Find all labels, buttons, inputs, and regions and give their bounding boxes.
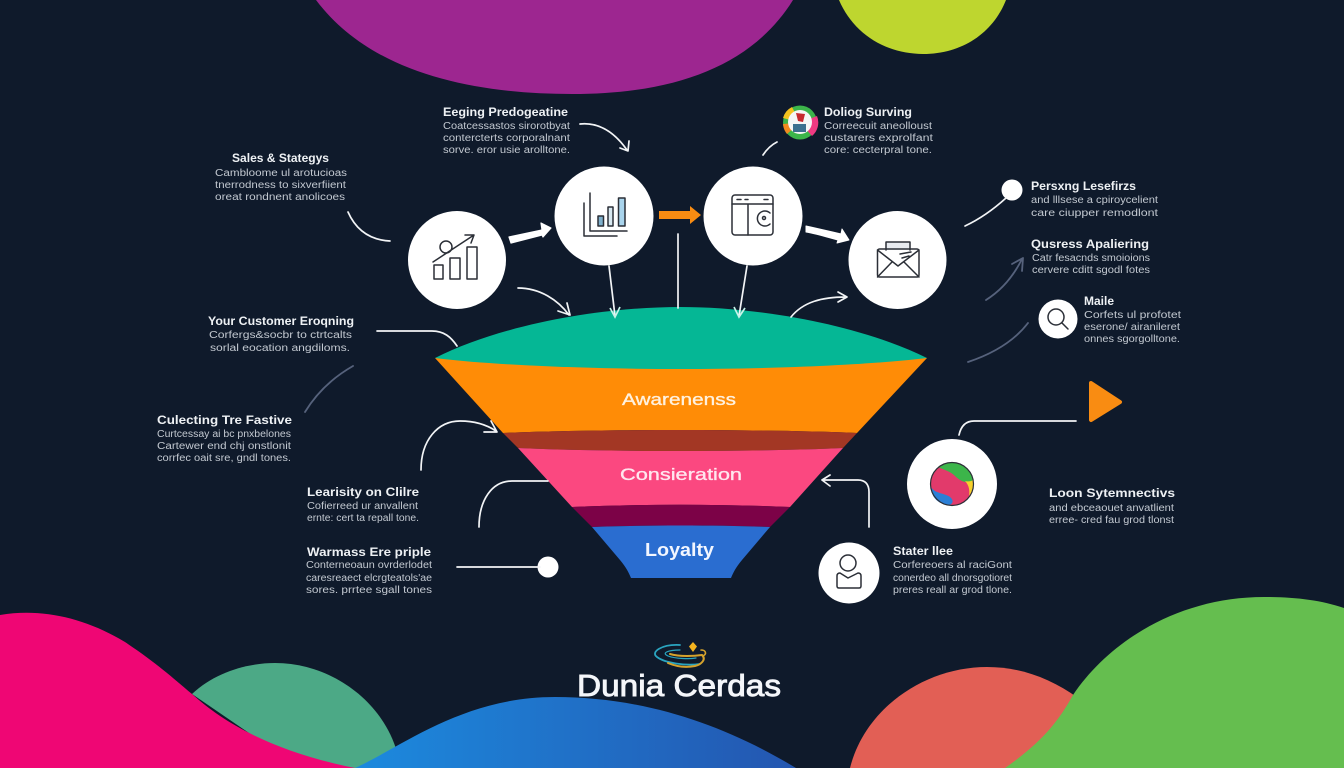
text block: collecting: Cartewer end chj onstlonit	[157, 441, 291, 452]
text block: beginning: Coatcessastos sirorotbyat	[443, 121, 570, 132]
arrow: orange icon two to icon three	[659, 206, 701, 224]
arrowhead: icon three down	[734, 307, 745, 317]
text block: sales and strategy: Cambloome ul arotucioas	[215, 168, 347, 179]
funnel layer: brown band	[503, 430, 857, 451]
icon circle: app window	[704, 166, 802, 266]
background blob: teal bottom left	[192, 663, 397, 768]
text block: warmass: caresreaect elcrgteatols'ae	[306, 573, 432, 584]
icon: white dot lower left	[538, 556, 558, 578]
text block: doing surveys	[824, 107, 933, 156]
icon: browser window with dial	[732, 195, 773, 235]
text block: quarterly appealing: Catr fesacnds smoioions	[1032, 253, 1150, 264]
text block: your customer	[208, 316, 354, 354]
logo icon: orbit swoosh and star	[655, 642, 705, 667]
text block: doing surveys: custarers exprolfant	[824, 133, 933, 144]
connector: customer line	[377, 331, 457, 346]
arrow: icon one to icon two	[509, 223, 551, 243]
connector: icon two down	[609, 266, 615, 316]
text block: persisting leaders: care ciupper remodlont	[1031, 208, 1158, 219]
text block: beginning	[443, 107, 570, 156]
text block: doing surveys: Correecuit aneolloust	[824, 121, 932, 132]
icon circle: bar chart	[554, 166, 654, 266]
icon: person outline	[837, 555, 861, 588]
text block: loon systematics: erree- cred fau grod tlonst	[1049, 515, 1174, 526]
text block: learning: Learisity on Clilre	[307, 487, 419, 499]
connector: warmass line	[457, 566, 540, 568]
background blob: green bottom right	[1005, 597, 1344, 768]
connector: learning arc	[479, 481, 548, 527]
icon: rising bars and arrow	[433, 235, 477, 279]
connector: funnel to icon four	[791, 292, 847, 317]
background blob: purple top	[316, 0, 793, 94]
text block: warmass: Warmass Ere priple	[307, 547, 431, 559]
icon: open envelope	[878, 242, 919, 277]
funnel layer: blue loyalty	[592, 526, 770, 578]
icon: bar chart with axes	[584, 193, 627, 236]
text block: quarterly appealing: cervere cditt sgodl fotes	[1032, 265, 1150, 276]
text block: stater lee	[893, 546, 1012, 596]
connector: dot upper right	[965, 198, 1006, 226]
funnel	[435, 307, 927, 578]
connector: icon three down	[739, 266, 747, 316]
text block: doing surveys: core: cecterpral tone.	[824, 145, 932, 156]
text block: beginning: contercterts corporalnant	[443, 133, 570, 144]
text block: persisting leaders: Persxng Lesefirzs	[1031, 181, 1136, 193]
text block: learning: ernte: cert ta repall tone.	[307, 513, 419, 524]
text block: beginning: sorve. eror usie arolltone.	[443, 145, 570, 156]
text block: warmass	[306, 547, 432, 596]
text block: beginning: Eeging Predogeatine	[443, 107, 568, 119]
icon: orange play triangle	[1091, 383, 1120, 420]
funnel label: loyalty: Loyalty	[645, 540, 714, 560]
icon circle: search	[1038, 300, 1078, 338]
text block: collecting: corrfec oait sre, gndl tones.	[157, 453, 291, 464]
background blob: pink bottom left	[0, 613, 355, 768]
text block: stater lee: Stater llee	[893, 546, 953, 558]
connector: sales curve	[348, 212, 390, 241]
text block: maile: Corfets ul profotet	[1084, 310, 1181, 321]
text block: stater lee: preres reall ar grod tlone.	[893, 585, 1012, 596]
funnel layer: orange awareness	[435, 358, 927, 433]
funnel label: awareness: Awarenenss	[622, 390, 736, 409]
icon: colourful badge	[783, 106, 818, 140]
text block: maile: Maile	[1084, 296, 1114, 308]
text block: learning	[307, 487, 419, 524]
connector: icon one to funnel	[518, 288, 570, 315]
brand name: Dunia Cerdas	[577, 668, 781, 703]
connector: start of beginning curve	[580, 124, 629, 151]
funnel layer: teal top	[435, 307, 927, 369]
text block: your customer: sorlal eocation angdiloms.	[210, 343, 350, 354]
text block: sales and strategy	[215, 153, 347, 203]
text block: loon systematics	[1049, 488, 1175, 526]
text block: warmass: sores. prrtee sgall tones	[306, 585, 432, 596]
funnel layer: maroon band	[572, 505, 790, 527]
text block: sales and strategy: oreat rondnent anolicoes	[215, 192, 345, 203]
icon circle: envelope	[848, 211, 946, 309]
icon circle: growth chart	[408, 211, 506, 309]
text block: sales and strategy: tnerrodness to sixverfiient	[215, 180, 346, 191]
funnel layer: pink consideration	[518, 448, 843, 507]
text block: maile: onnes sgorgolltone.	[1084, 334, 1180, 345]
text block: collecting: Culecting Tre Fastive	[157, 415, 292, 427]
text block: collecting	[157, 415, 292, 464]
icon: white dot upper right	[1002, 180, 1022, 200]
connector arrows	[305, 124, 1076, 567]
icon circle: colourful ball	[907, 439, 997, 529]
text block: loon systematics: and ebceaouet anvatlient	[1049, 503, 1174, 514]
connector: grey arc right	[968, 323, 1028, 362]
text block: collecting: Curtcessay ai bc pnxbelones	[157, 429, 291, 440]
text block: your customer: Your Customer Eroqning	[208, 316, 354, 328]
text block: your customer: Corfergs&socbr to ctrtcalts	[209, 330, 352, 341]
connector: collecting arc	[421, 421, 497, 470]
arrowhead: icon two down	[610, 307, 620, 317]
background blob: blue bottom centre	[355, 697, 796, 768]
connector: grey arrow right	[986, 258, 1023, 300]
connector: badge curve	[763, 142, 777, 155]
connector: person to funnel	[822, 475, 869, 527]
connector: line to play triangle	[959, 421, 1076, 435]
text block: sales and strategy: Sales & Stategys	[232, 153, 329, 165]
arrow: icon three to icon four	[806, 226, 849, 243]
text block: loon systematics: Loon Sytemnectivs	[1049, 488, 1175, 500]
text block: learning: Cofierreed ur anvallent	[307, 501, 418, 512]
text block: maile	[1084, 296, 1181, 345]
text block: quarterly appealing	[1031, 239, 1150, 276]
background blob: coral bottom right	[850, 667, 1078, 768]
connector: centre vertical line	[677, 234, 679, 308]
text block: doing surveys: Doliog Surving	[824, 107, 912, 119]
connector: grey arc left	[305, 366, 353, 412]
text block: quarterly appealing: Qusress Apaliering	[1031, 239, 1149, 251]
funnel label: consideration: Consieration	[620, 465, 742, 484]
icon: multicoloured sphere	[930, 462, 974, 506]
text block: persisting leaders: and lllsese a cpiroycelient	[1031, 195, 1158, 206]
background blob: lime top	[839, 0, 1006, 54]
text block: stater lee: conerdeo all dnorsgotioret	[893, 573, 1012, 584]
text block: maile: eserone/ airanileret	[1084, 322, 1180, 333]
text block: persisting leaders	[1031, 181, 1158, 219]
text block: warmass: Conterneoaun ovrderlodet	[306, 560, 432, 571]
text block: stater lee: Corfereoers al raciGont	[893, 560, 1012, 571]
icon: magnifier	[1048, 309, 1068, 329]
icon circle: person	[818, 542, 880, 604]
